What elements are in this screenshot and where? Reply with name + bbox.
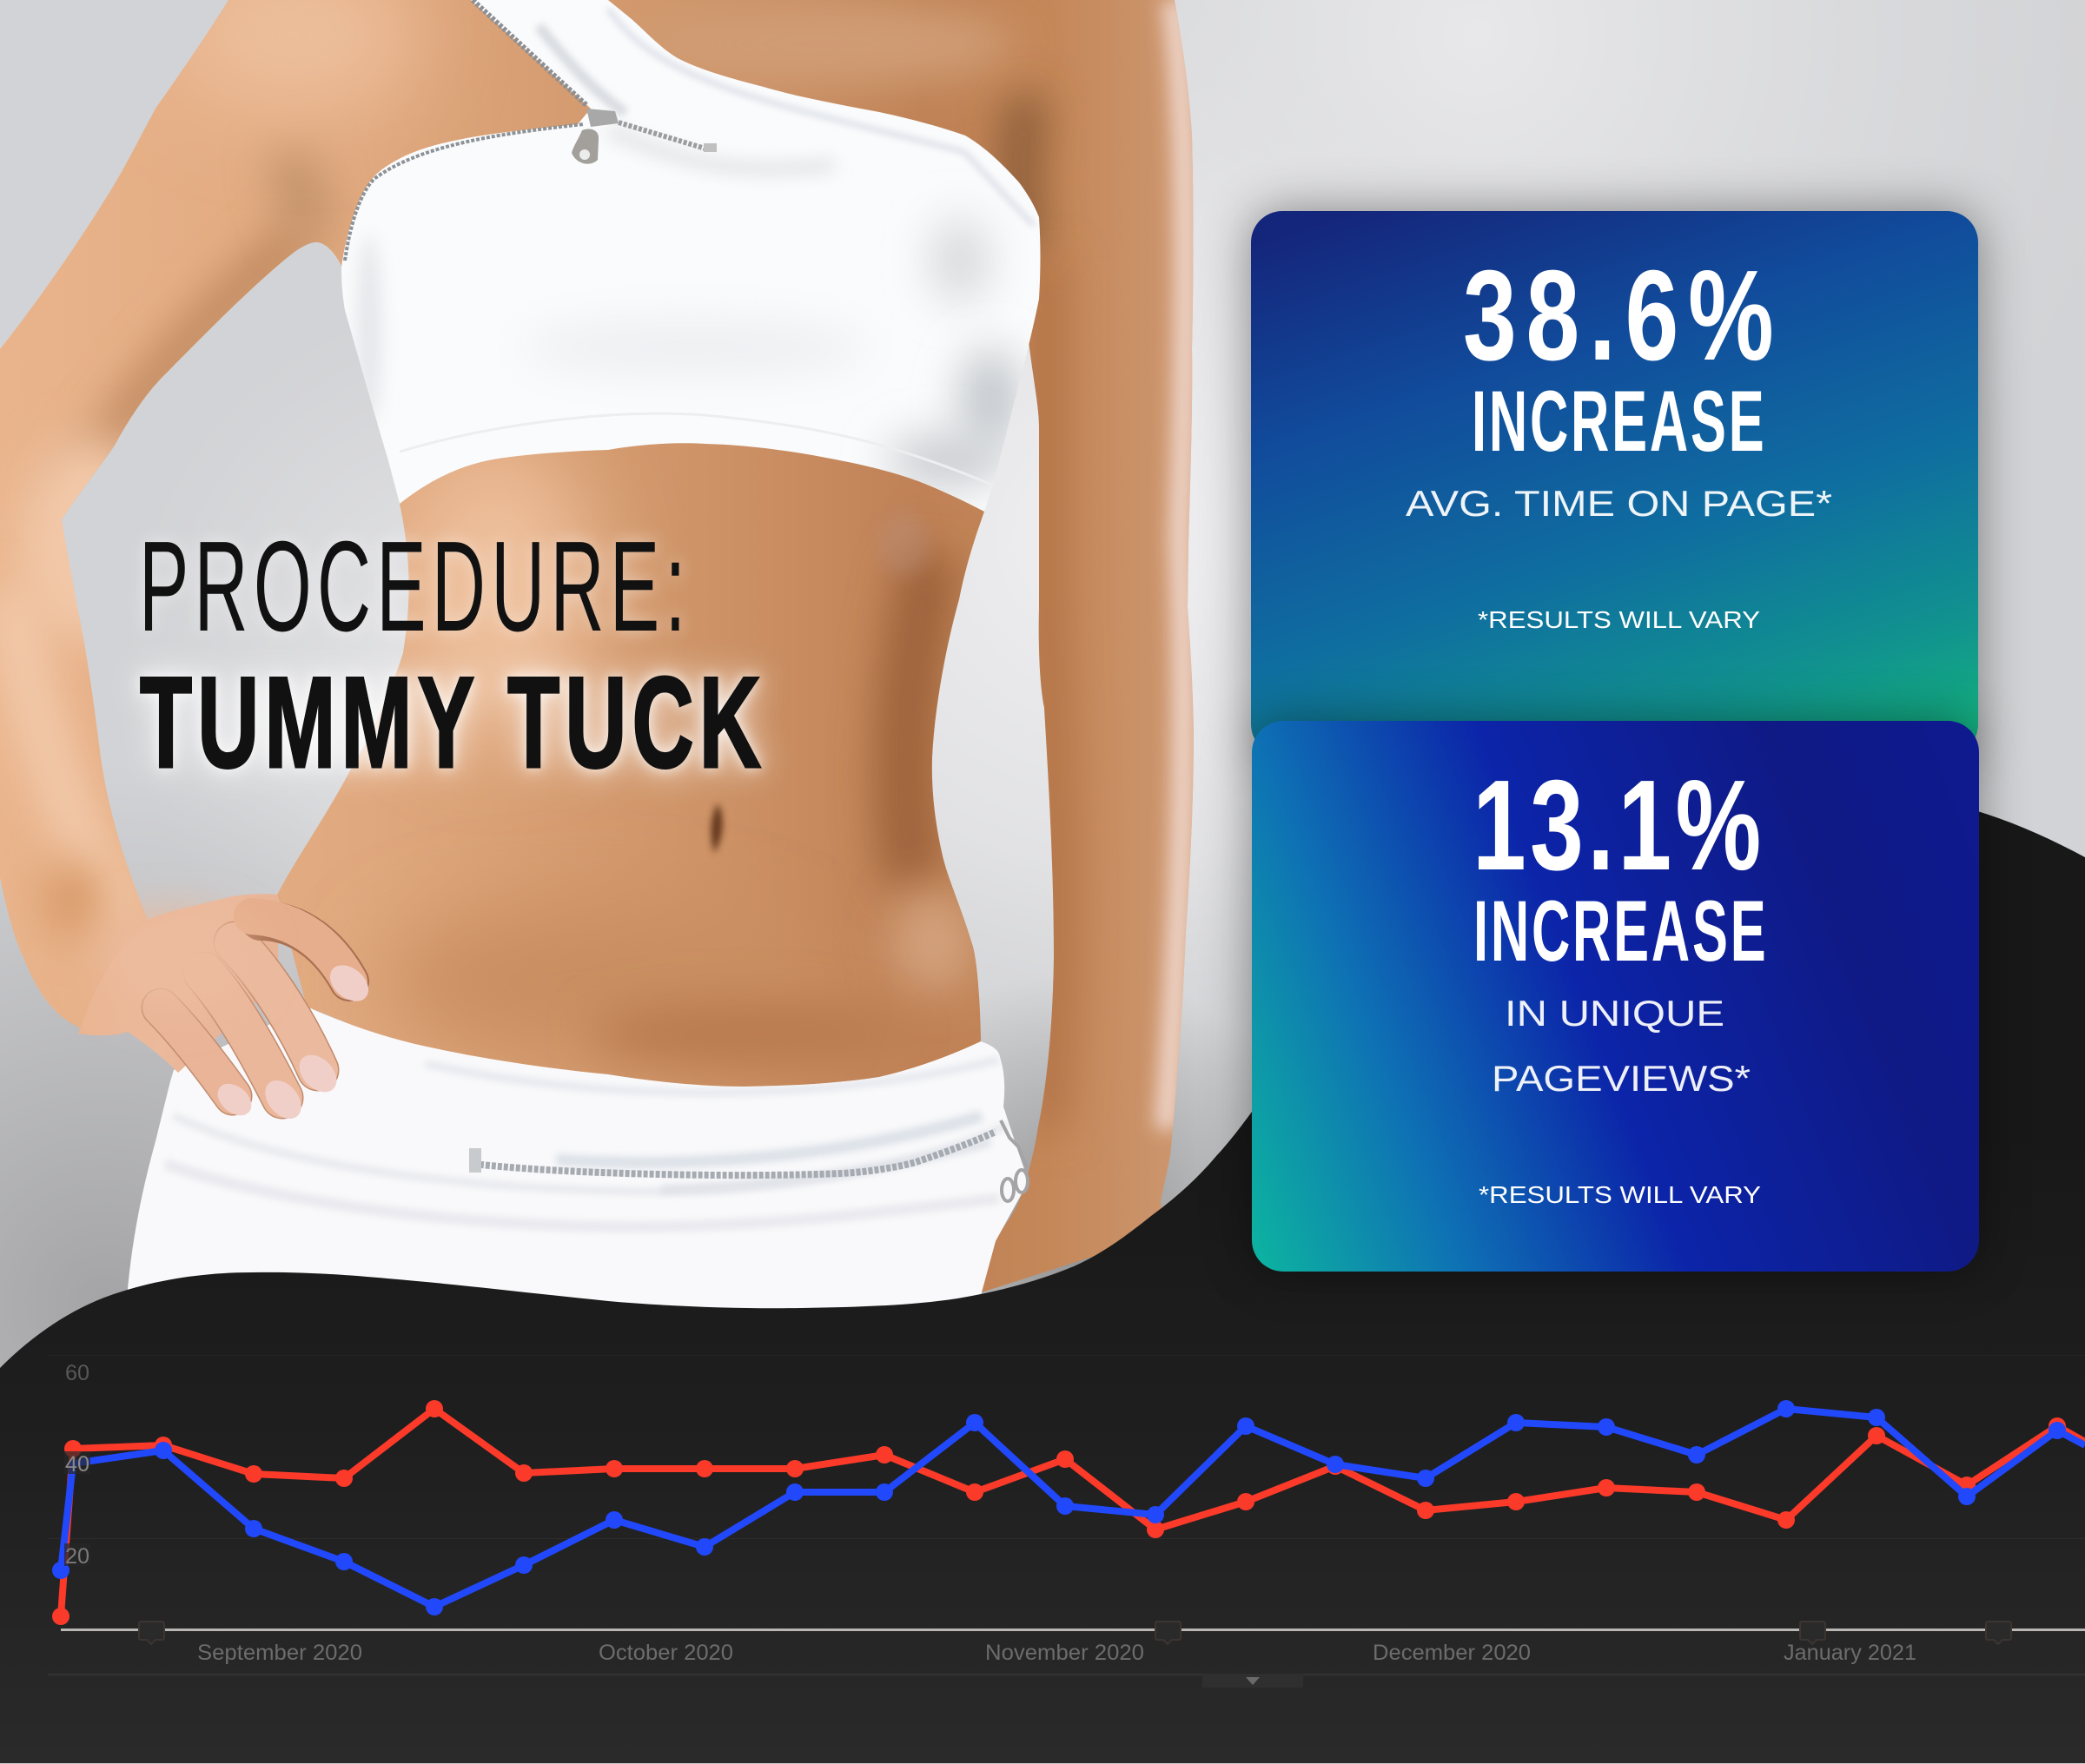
series: red [52,1400,2085,1625]
annotation markers [139,1622,2011,1644]
label: in unique: IN UNIQUE [1505,993,1724,1034]
hand [78,894,375,1126]
zipper: bust right [619,122,708,149]
zipper: bust left [345,124,584,261]
y axis labels: 60 [65,1361,89,1385]
zipper: waist [473,1132,996,1175]
fingernails [212,958,375,1126]
y axis labels: 20 [65,1544,89,1569]
x axis [61,1629,2085,1631]
zipper pull: waist [1001,1120,1028,1201]
skin: arms and torso [0,0,1216,1320]
card: avg time on page [1251,211,1978,756]
series: blue [52,1400,2085,1615]
label: increase: INCREASE [1472,373,1764,470]
card background [1251,211,1978,756]
x axis labels [197,1641,1916,1665]
label: increase: INCREASE [1473,883,1766,980]
stat: 38.6%: 38.6% [1463,243,1774,387]
card: unique pageviews [1252,721,1979,1272]
heading: PROCEDURE: PROCEDURE: [139,513,685,658]
zipper tab: waist [469,1148,481,1173]
fingers [161,916,349,1098]
x axis labels: December 2020 [1373,1641,1531,1665]
y axis labels: 40 [65,1452,89,1477]
x axis labels: November 2020 [985,1641,1144,1665]
x axis labels: January 2021 [1784,1641,1916,1665]
x axis labels: October 2020 [599,1641,733,1665]
navel [712,803,723,853]
disclaimer: *RESULTS WILL VARY [1479,1181,1761,1208]
soft palm blend [96,912,252,1008]
back of hand [78,894,278,1073]
white skirt [122,999,1042,1320]
line chart [48,1355,2085,1688]
y axis labels [64,1361,90,1569]
label: avg time on page: AVG. TIME ON PAGE* [1406,483,1832,524]
disclaimer: *RESULTS WILL VARY [1478,606,1760,633]
card background [1252,721,1979,1272]
heading: TUMMY TUCK: TUMMY TUCK [140,650,761,795]
label: pageviews: PAGEVIEWS* [1492,1058,1751,1099]
photo: woman torso in white top and skirt [0,0,1216,1320]
collapse tab [1202,1674,1303,1688]
dark wave panel [0,791,2085,1764]
zipper: shoulder [473,0,587,106]
x axis labels: September 2020 [197,1641,362,1665]
zipper pull [572,109,717,164]
stat: 13.1%: 13.1% [1473,753,1761,897]
white top [330,0,1060,521]
